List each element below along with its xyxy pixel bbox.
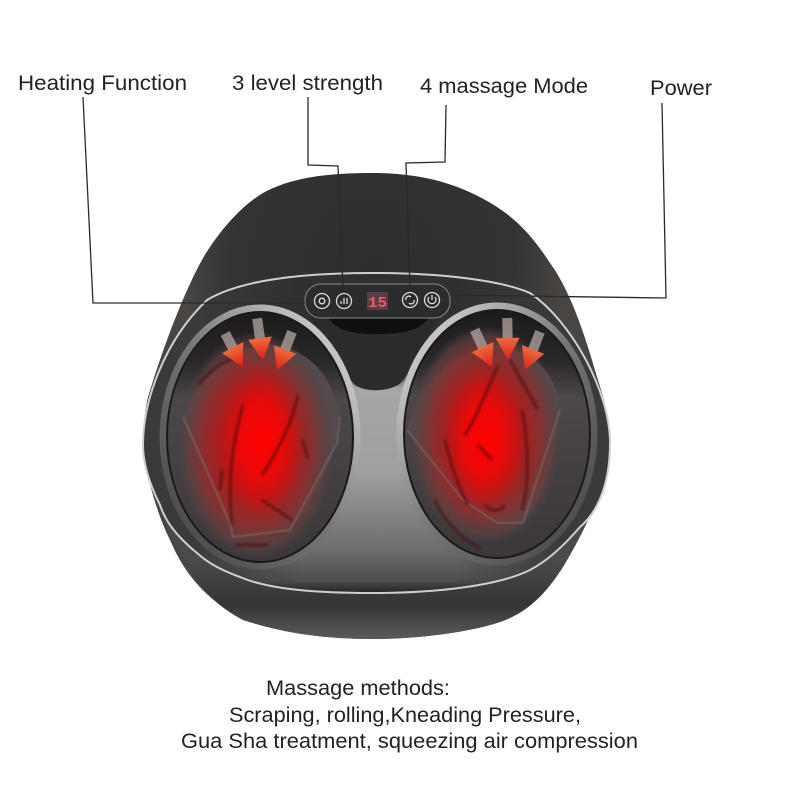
left arrows — [215, 317, 303, 374]
right outer side band — [479, 302, 609, 580]
right fabric folds — [435, 360, 538, 548]
silver rim line — [143, 273, 610, 593]
massage methods caption — [181, 677, 638, 753]
left outer side band — [144, 297, 272, 580]
caption line 3: Gua Sha treatment, squeezing air compression — [181, 730, 638, 753]
right cavity — [404, 310, 590, 558]
control panel — [305, 284, 450, 318]
panel shadow — [329, 318, 428, 334]
mode button — [402, 292, 418, 308]
heating button — [314, 294, 330, 308]
plate base — [237, 373, 524, 592]
line: 3 level strength — [308, 97, 343, 288]
power button — [424, 292, 440, 308]
outer body silhouette — [143, 173, 611, 639]
display digits: 15 — [368, 295, 387, 312]
left seam — [183, 417, 340, 537]
label: 3 level strength: 3 level strength — [232, 72, 383, 95]
caption line 2: Scraping, rolling,Kneading Pressure, — [229, 704, 581, 727]
strength button — [336, 294, 352, 308]
right foot well — [400, 306, 594, 562]
right arrows — [464, 318, 551, 374]
label: power: Power — [650, 77, 712, 100]
label: heating function: Heating Function — [18, 72, 187, 95]
right arrow 1 — [464, 325, 503, 372]
line: 4 massage mode — [406, 105, 446, 288]
left arrow 1 — [215, 328, 254, 373]
left heat glow — [178, 331, 334, 559]
left arrow 2 — [245, 317, 275, 362]
right core glow — [444, 368, 524, 512]
left cavity — [167, 312, 353, 562]
right arrow 2 — [495, 318, 520, 360]
caption heading: Massage methods: — [266, 677, 450, 700]
lower skirt — [160, 443, 610, 639]
left core glow — [220, 364, 304, 516]
right rim — [400, 306, 594, 562]
left arrow 3 — [266, 327, 303, 374]
leader lines — [83, 97, 666, 303]
right fabric — [407, 345, 560, 523]
left rim — [163, 308, 357, 566]
dark central notch — [346, 370, 409, 390]
digital display — [367, 292, 388, 310]
panel base — [305, 284, 450, 318]
device: foot massager — [140, 173, 615, 639]
right seam — [407, 410, 560, 523]
right heat glow — [410, 325, 562, 545]
label: 4 massage mode: 4 massage Mode — [420, 75, 588, 98]
line: power — [450, 103, 666, 298]
line: heating function — [83, 97, 305, 303]
face plate — [144, 302, 609, 592]
left fabric folds — [198, 358, 308, 545]
right arrow 3 — [514, 327, 551, 374]
left fabric — [183, 345, 340, 537]
left foot well — [163, 308, 357, 566]
